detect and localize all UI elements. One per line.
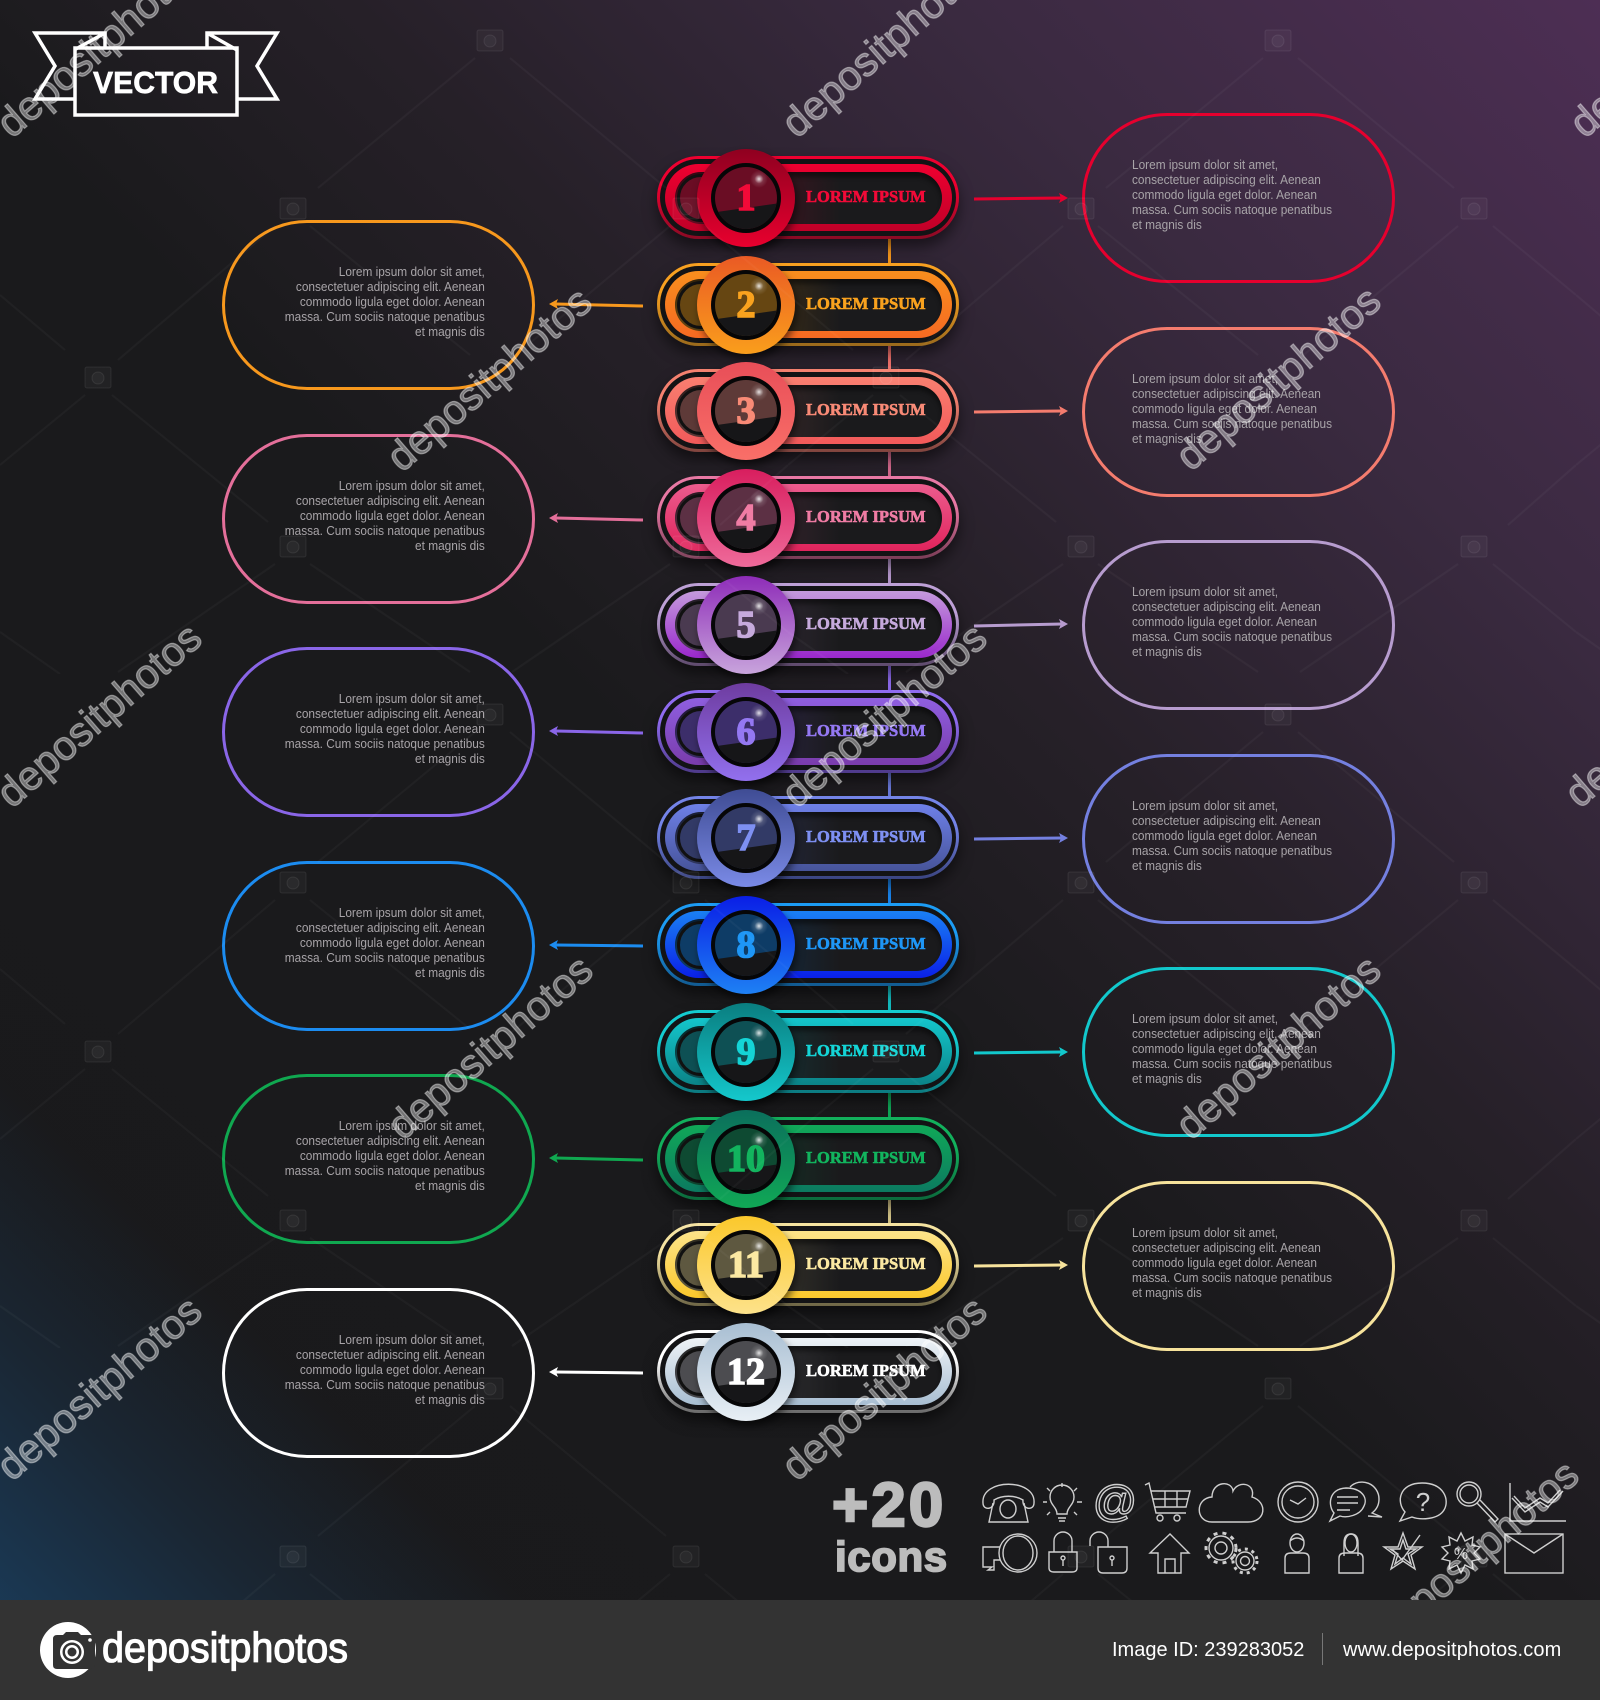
panel: text bubble 1 bbox=[1082, 113, 1395, 283]
icon: shopping cart bbox=[1145, 1483, 1190, 1521]
panel: text bubble 5: commodo ligula eget dolor. Aenean bbox=[1132, 615, 1317, 629]
panel: text bubble 8 bbox=[222, 861, 535, 1031]
panel: text bubble 12: Lorem ipsum dolor sit amet, bbox=[339, 1333, 485, 1347]
label 11: LOREM IPSUM bbox=[806, 1254, 926, 1273]
label 6: LOREM IPSUM bbox=[806, 721, 926, 740]
watermarks: depositphotos bbox=[1167, 277, 1389, 479]
icon: question bubble bbox=[1400, 1483, 1446, 1521]
panel: text bubble 5 bbox=[1082, 540, 1395, 710]
panel: text bubble 4: et magnis dis bbox=[415, 539, 485, 553]
icon: man bbox=[1285, 1534, 1309, 1573]
number 3: 3 bbox=[736, 390, 756, 432]
arrow 10 bbox=[549, 1153, 643, 1163]
watermarks: depositphotos bbox=[1365, 1451, 1587, 1653]
number 12: 12 bbox=[727, 1351, 765, 1393]
panel: text bubble 4: commodo ligula eget dolor. Aenean bbox=[300, 509, 485, 523]
panel: text bubble 7: massa. Cum sociis natoque penatibus bbox=[1132, 844, 1332, 858]
panel: text bubble 6: consectetuer adipiscing elit. Aenean bbox=[296, 707, 485, 721]
number 11: 11 bbox=[728, 1244, 764, 1286]
panel: text bubble 7: commodo ligula eget dolor. Aenean bbox=[1132, 829, 1317, 843]
icon: woman bbox=[1339, 1534, 1363, 1573]
panel: text bubble 12: et magnis dis bbox=[415, 1393, 485, 1407]
button 10 bbox=[657, 1117, 959, 1200]
icon: house bbox=[1150, 1534, 1189, 1573]
panel: text bubble 6: Lorem ipsum dolor sit amet, bbox=[339, 692, 485, 706]
panel: text bubble 8: commodo ligula eget dolor. Aenean bbox=[300, 936, 485, 950]
icons heading: icons bbox=[835, 1533, 948, 1580]
panel: text bubble 9: Lorem ipsum dolor sit amet, bbox=[1132, 1012, 1278, 1026]
label 2: LOREM IPSUM bbox=[806, 294, 926, 313]
button 4 bbox=[657, 476, 959, 559]
panel: text bubble 9: commodo ligula eget dolor. Aenean bbox=[1132, 1042, 1317, 1056]
icon: cloud bbox=[1199, 1484, 1263, 1522]
number 8: 8 bbox=[736, 924, 756, 966]
panel: text bubble 10 bbox=[222, 1074, 535, 1244]
footer bar bbox=[0, 1600, 1600, 1700]
panel: text bubble 7: Lorem ipsum dolor sit amet, bbox=[1132, 799, 1278, 813]
panel: text bubble 3: Lorem ipsum dolor sit amet, bbox=[1132, 372, 1278, 386]
vector ribbon badge bbox=[32, 31, 280, 117]
panel: text bubble 1: Lorem ipsum dolor sit amet, bbox=[1132, 158, 1278, 172]
arrow 12 bbox=[549, 1367, 643, 1377]
panel: text bubble 9: massa. Cum sociis natoque penatibus bbox=[1132, 1057, 1332, 1071]
panel: text bubble 7 bbox=[1082, 754, 1395, 924]
watermarks: depositphotos bbox=[1167, 946, 1389, 1148]
panel: text bubble 10: commodo ligula eget dolor. Aenean bbox=[300, 1149, 485, 1163]
panel: text bubble 12: commodo ligula eget dolor. Aenean bbox=[300, 1363, 485, 1377]
button 9 bbox=[657, 1010, 959, 1093]
label 5: LOREM IPSUM bbox=[806, 614, 926, 633]
button 8 bbox=[657, 903, 959, 986]
panel: text bubble 9: consectetuer adipiscing elit. Aenean bbox=[1132, 1027, 1321, 1041]
panel: text bubble 5: massa. Cum sociis natoque penatibus bbox=[1132, 630, 1332, 644]
number 6: 6 bbox=[736, 711, 756, 753]
panel: text bubble 3: et magnis dis bbox=[1132, 432, 1202, 446]
panel: text bubble 3 bbox=[1082, 327, 1395, 497]
panel: text bubble 1: massa. Cum sociis natoque penatibus bbox=[1132, 203, 1332, 217]
panel: text bubble 4: Lorem ipsum dolor sit amet, bbox=[339, 479, 485, 493]
vector text: VECTOR bbox=[93, 65, 218, 100]
icon: percent badge bbox=[1442, 1533, 1480, 1573]
panel: text bubble 9: et magnis dis bbox=[1132, 1072, 1202, 1086]
panel: text bubble 11: consectetuer adipiscing elit. Aenean bbox=[1132, 1241, 1321, 1255]
panel: text bubble 10: Lorem ipsum dolor sit amet, bbox=[339, 1119, 485, 1133]
image id: Image ID: 239283052 bbox=[1112, 1639, 1304, 1661]
panel: text bubble 2: Lorem ipsum dolor sit amet, bbox=[339, 265, 485, 279]
panel: text bubble 3: commodo ligula eget dolor. Aenean bbox=[1132, 402, 1317, 416]
label 8: LOREM IPSUM bbox=[806, 934, 926, 953]
panel: text bubble 7: et magnis dis bbox=[1132, 859, 1202, 873]
number 1: 1 bbox=[736, 177, 756, 219]
arrow 11 bbox=[974, 1260, 1068, 1270]
panel: text bubble 8: Lorem ipsum dolor sit amet, bbox=[339, 906, 485, 920]
icon: key bbox=[983, 1534, 1037, 1572]
label 4: LOREM IPSUM bbox=[806, 507, 926, 526]
panel: text bubble 10: et magnis dis bbox=[415, 1179, 485, 1193]
connector line: spine between buttons bbox=[888, 239, 891, 1223]
label 10: LOREM IPSUM bbox=[806, 1148, 926, 1167]
arrow 2 bbox=[549, 299, 643, 309]
button 2 bbox=[657, 263, 959, 346]
panel: text bubble 6 bbox=[222, 647, 535, 817]
number 5: 5 bbox=[736, 604, 756, 646]
panel: text bubble 7: consectetuer adipiscing elit. Aenean bbox=[1132, 814, 1321, 828]
panel: text bubble 8: consectetuer adipiscing elit. Aenean bbox=[296, 921, 485, 935]
label 1: LOREM IPSUM bbox=[806, 187, 926, 206]
+20 heading: +20 bbox=[832, 1471, 946, 1540]
panel: text bubble 4 bbox=[222, 434, 535, 604]
number 2: 2 bbox=[736, 284, 756, 326]
watermarks: depositphotos bbox=[773, 614, 995, 816]
panel: text bubble 12 bbox=[222, 1288, 535, 1458]
panel: text bubble 11: et magnis dis bbox=[1132, 1286, 1202, 1300]
watermarks: depositphotos bbox=[379, 946, 601, 1148]
panel: text bubble 1: et magnis dis bbox=[1132, 218, 1202, 232]
button 1 bbox=[657, 156, 959, 239]
panel: text bubble 6: massa. Cum sociis natoque penatibus bbox=[285, 737, 485, 751]
label 9: LOREM IPSUM bbox=[806, 1041, 926, 1060]
panel: text bubble 11: Lorem ipsum dolor sit amet, bbox=[1132, 1226, 1278, 1240]
panel: text bubble 9 bbox=[1082, 967, 1395, 1137]
label 12: LOREM IPSUM bbox=[806, 1361, 926, 1380]
arrow 3 bbox=[974, 406, 1068, 416]
button 6 bbox=[657, 690, 959, 773]
arrow 6 bbox=[549, 726, 643, 736]
icon: line chart bbox=[1510, 1483, 1566, 1521]
icon: open padlock bbox=[1090, 1532, 1127, 1573]
number 4: 4 bbox=[736, 497, 756, 539]
label 7: LOREM IPSUM bbox=[806, 827, 926, 846]
panel: text bubble 5: Lorem ipsum dolor sit amet, bbox=[1132, 585, 1278, 599]
button 3 bbox=[657, 369, 959, 452]
panel: text bubble 6: et magnis dis bbox=[415, 752, 485, 766]
label 3: LOREM IPSUM bbox=[806, 400, 926, 419]
panel: text bubble 4: massa. Cum sociis natoque penatibus bbox=[285, 524, 485, 538]
footer divider bbox=[1322, 1633, 1323, 1665]
panel: text bubble 1: consectetuer adipiscing elit. Aenean bbox=[1132, 173, 1321, 187]
icon: clock bbox=[1278, 1482, 1318, 1522]
panel: text bubble 3: massa. Cum sociis natoque penatibus bbox=[1132, 417, 1332, 431]
arrow 7 bbox=[974, 833, 1068, 843]
panel: text bubble 2: commodo ligula eget dolor. Aenean bbox=[300, 295, 485, 309]
panel: text bubble 11 bbox=[1082, 1181, 1395, 1351]
icon: question bubble: ? bbox=[1416, 1487, 1430, 1517]
icon: light bulb bbox=[1043, 1483, 1082, 1521]
number 10: 10 bbox=[727, 1138, 765, 1180]
panel: text bubble 8: et magnis dis bbox=[415, 966, 485, 980]
arrow 9 bbox=[974, 1047, 1068, 1057]
watermarks: depositphotos bbox=[378, 278, 600, 480]
watermarks: depositphotos bbox=[773, 1287, 995, 1489]
panel: text bubble 11: massa. Cum sociis natoque penatibus bbox=[1132, 1271, 1332, 1285]
arrow 8 bbox=[549, 940, 643, 950]
panel: text bubble 6: commodo ligula eget dolor. Aenean bbox=[300, 722, 485, 736]
button 11 bbox=[657, 1223, 959, 1306]
footer logo text: depositphotos bbox=[102, 1624, 348, 1671]
icon: gears bbox=[1206, 1533, 1257, 1573]
website url: www.depositphotos.com bbox=[1343, 1639, 1561, 1661]
panel: text bubble 4: consectetuer adipiscing elit. Aenean bbox=[296, 494, 485, 508]
panel: text bubble 5: et magnis dis bbox=[1132, 645, 1202, 659]
footer logo icon bbox=[40, 1622, 96, 1678]
panel: text bubble 12: massa. Cum sociis natoque penatibus bbox=[285, 1378, 485, 1392]
icon: envelope bbox=[1505, 1534, 1563, 1573]
panel: text bubble 12: consectetuer adipiscing elit. Aenean bbox=[296, 1348, 485, 1362]
panel: text bubble 2: consectetuer adipiscing elit. Aenean bbox=[296, 280, 485, 294]
panel: text bubble 10: consectetuer adipiscing elit. Aenean bbox=[296, 1134, 485, 1148]
icon: star with check bbox=[1384, 1533, 1422, 1569]
icon: chat bubbles bbox=[1330, 1482, 1382, 1521]
panel: text bubble 2: et magnis dis bbox=[415, 325, 485, 339]
panel: text bubble 8: massa. Cum sociis natoque penatibus bbox=[285, 951, 485, 965]
number 9: 9 bbox=[736, 1031, 756, 1073]
panel: text bubble 11: commodo ligula eget dolor. Aenean bbox=[1132, 1256, 1317, 1270]
icon: magnifier bbox=[1457, 1482, 1498, 1522]
panel: text bubble 5: consectetuer adipiscing elit. Aenean bbox=[1132, 600, 1321, 614]
icon: padlock bbox=[1049, 1532, 1077, 1572]
icon: at sign: @ bbox=[1093, 1477, 1137, 1526]
arrow 4 bbox=[549, 513, 643, 523]
panel: text bubble 3: consectetuer adipiscing elit. Aenean bbox=[1132, 387, 1321, 401]
arrow 5 bbox=[974, 619, 1068, 629]
icon: percent badge: % bbox=[1454, 1546, 1468, 1563]
panel: text bubble 10: massa. Cum sociis natoque penatibus bbox=[285, 1164, 485, 1178]
button 12 bbox=[657, 1330, 959, 1413]
panel: text bubble 1: commodo ligula eget dolor. Aenean bbox=[1132, 188, 1317, 202]
panel: text bubble 2: massa. Cum sociis natoque penatibus bbox=[285, 310, 485, 324]
number 7: 7 bbox=[736, 817, 756, 859]
arrow 1 bbox=[974, 193, 1068, 203]
button 7 bbox=[657, 796, 959, 879]
panel: text bubble 2 bbox=[222, 220, 535, 390]
button 5 bbox=[657, 583, 959, 666]
icon: telephone bbox=[983, 1484, 1034, 1522]
